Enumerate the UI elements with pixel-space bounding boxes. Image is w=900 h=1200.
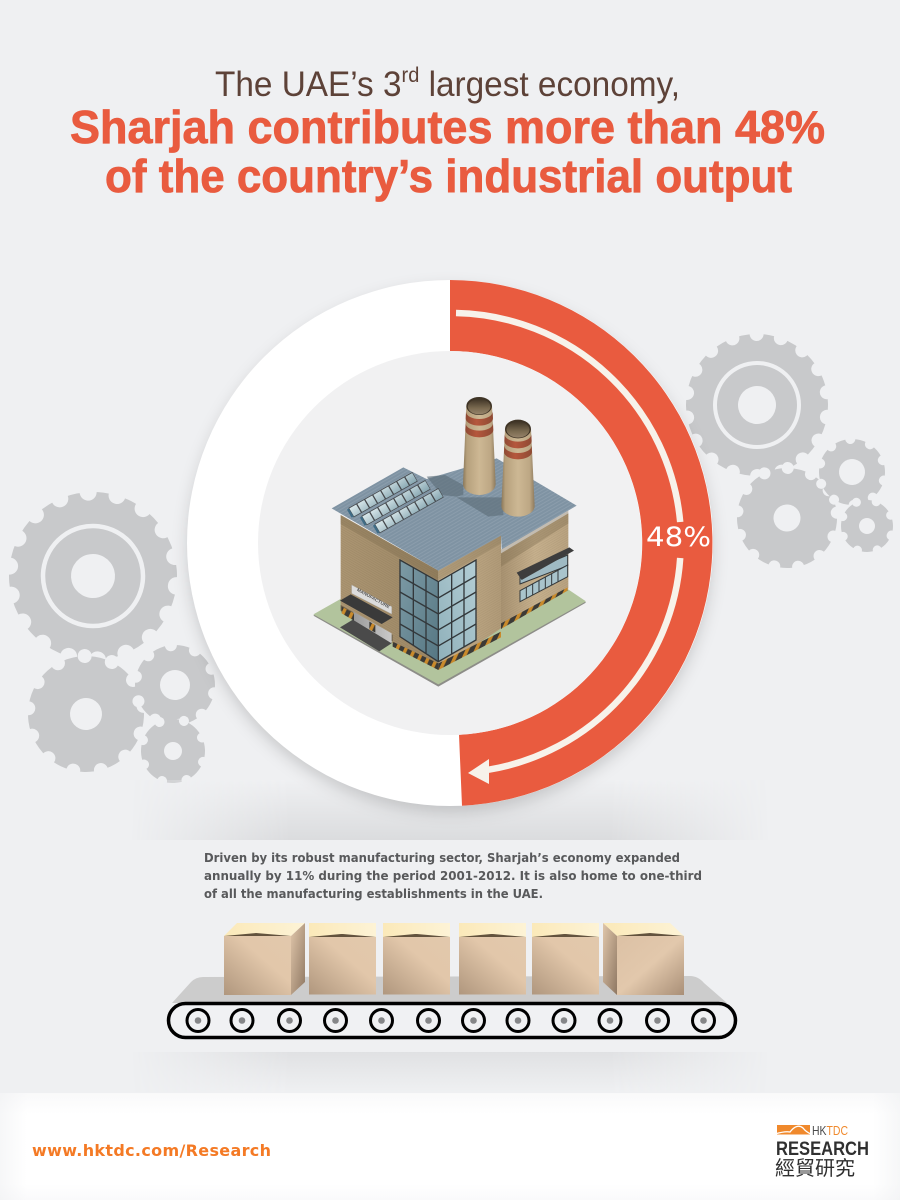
donut base <box>187 280 713 806</box>
description text <box>204 851 702 901</box>
hazard stripes <box>393 587 568 670</box>
title line 1: The UAE’s 3 <box>215 65 411 104</box>
logo research: RESEARCH <box>776 1138 869 1160</box>
factory ramp <box>340 619 393 651</box>
box 4 <box>459 923 526 994</box>
description line 2: annually by 11% during the period 2001-2012. It is also home to one-third <box>204 869 702 883</box>
box 6 <box>603 923 684 995</box>
factory roof <box>332 458 577 571</box>
side windows <box>517 547 574 602</box>
gears: right cluster <box>675 323 900 573</box>
donut shadow <box>188 288 712 812</box>
factory ground <box>313 589 586 687</box>
curtain-wall windows <box>400 560 476 662</box>
logo wordmark: HKTDC <box>812 1123 848 1138</box>
red 48% segment <box>450 280 712 806</box>
factory illustration <box>313 397 586 687</box>
donut chart: 48% <box>187 280 713 806</box>
percentage label: 48% <box>646 522 711 553</box>
shadow above text <box>167 780 706 840</box>
box 3 <box>383 923 450 994</box>
rollers <box>187 1010 714 1032</box>
footer url: www.hktdc.com/Research <box>32 1141 271 1160</box>
title line 1: rd <box>402 64 419 87</box>
chimney 1 <box>463 397 496 495</box>
title line 3: of the country’s industrial output <box>105 150 792 202</box>
conveyor belt <box>168 976 736 1038</box>
chimney 2 <box>501 420 535 517</box>
box 2 <box>309 923 376 994</box>
HKTDC Research logo <box>775 1123 869 1180</box>
logo mark <box>775 1125 811 1134</box>
title line 2: Sharjah contributes more than 48% <box>70 101 825 153</box>
boxes on conveyor <box>224 923 684 995</box>
factory walls <box>341 511 568 670</box>
progress arrow <box>456 313 680 784</box>
footer band <box>0 1093 900 1200</box>
description line 1: Driven by its robust manufacturing sector, Sharjah’s economy expanded <box>204 851 680 865</box>
belt loop <box>168 1004 736 1038</box>
logo chinese: 經貿研究 <box>775 1157 855 1180</box>
loading dock <box>340 585 393 643</box>
conveyor shadow <box>218 1052 682 1070</box>
donut centre <box>258 351 642 735</box>
title line 1: largest economy, <box>419 65 680 104</box>
title <box>70 64 825 202</box>
chimney roof shadow <box>427 475 463 497</box>
description line 3: of all the manufacturing establishments in the UAE. <box>204 887 543 901</box>
loading dock: MANUFACTURE <box>356 587 391 609</box>
conveyor back plate <box>172 976 727 1003</box>
box 1 <box>224 923 305 995</box>
gears: left cluster <box>0 482 222 792</box>
box 5 <box>532 923 599 994</box>
solar panels <box>347 472 444 534</box>
